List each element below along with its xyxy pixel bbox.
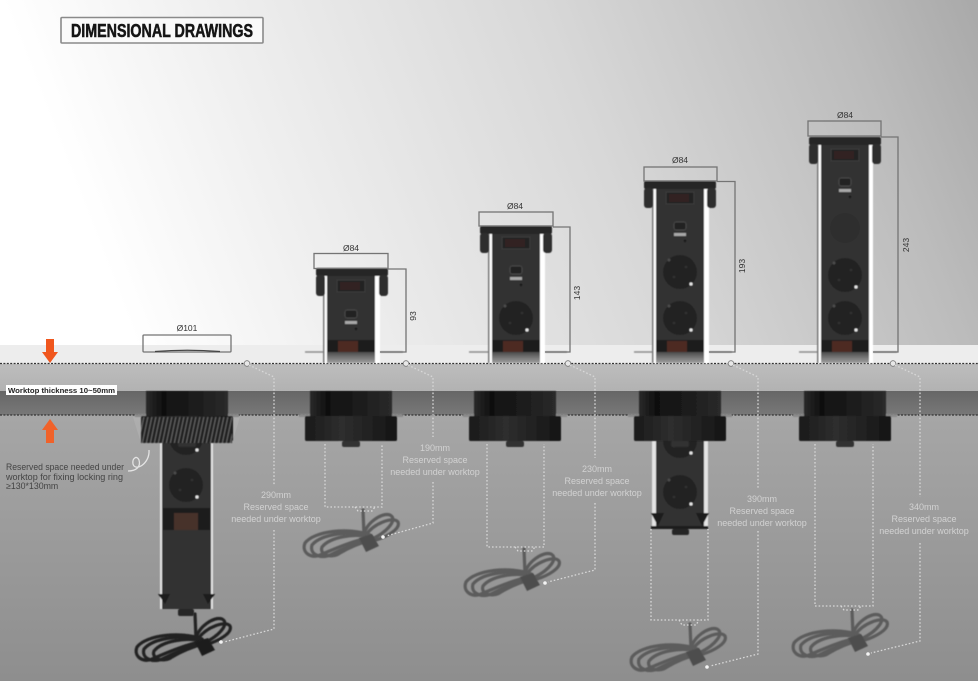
collar and locking ring, tower 243 — [793, 391, 897, 447]
worktop upper dotted edge — [0, 362, 978, 364]
reserved space halo around locking ring — [133, 417, 240, 443]
tower 243 dimensions: Ø84 — [837, 110, 853, 120]
tower 143 dimensions: 143 — [572, 286, 582, 300]
worktop top surface — [0, 345, 978, 364]
190mm callout: needed under worktop — [390, 467, 480, 477]
collar and locking ring, tower 93 — [299, 391, 403, 447]
reserved depth outline, tower 243 — [815, 444, 873, 610]
cable, flush version — [136, 614, 230, 661]
flush cover: Ø101 dimension: Ø101 — [177, 323, 198, 333]
title: DIMENSIONAL DRAWINGS — [71, 21, 253, 41]
reserved depth outline, tower 93 — [325, 444, 382, 511]
230mm callout: Reserved space — [564, 476, 630, 486]
collar and locking ring, tower 143 — [463, 391, 567, 447]
tower 93 dimensions — [314, 243, 418, 352]
reserved depth outline, tower 193 — [651, 529, 708, 625]
tower 243 — [799, 137, 897, 363]
tower 143 dimensions — [479, 201, 582, 352]
worktop underside band — [0, 391, 978, 415]
390mm callout: needed under worktop — [717, 518, 807, 528]
tower 143 dimensions: Ø84 — [507, 201, 523, 211]
340mm callout: 340mm — [909, 502, 939, 512]
tower 193 dimensions: 193 — [737, 259, 747, 273]
tower 243 dimensions: 243 — [901, 238, 911, 252]
title — [61, 18, 263, 43]
collar and locking ring, flush version — [135, 391, 239, 447]
390mm callout — [705, 361, 807, 669]
worktop lower dotted edge — [0, 414, 978, 416]
collar and locking ring, tower 193 — [628, 391, 732, 447]
340mm callout: needed under worktop — [879, 526, 969, 536]
lowered tower below first collar — [158, 421, 215, 616]
390mm callout: 390mm — [747, 494, 777, 504]
note pointer squiggle — [128, 450, 149, 471]
tower 143 — [469, 226, 567, 363]
background gradient — [0, 0, 978, 346]
230mm callout: 230mm — [582, 464, 612, 474]
190mm callout — [381, 361, 480, 539]
340mm callout: Reserved space — [891, 514, 957, 524]
tower 93 dimensions: 93 — [408, 311, 418, 321]
plug, tower 93 — [359, 534, 379, 552]
plug, flush version — [195, 638, 215, 656]
tower 93 — [305, 268, 403, 363]
230mm callout — [543, 361, 642, 585]
cable, tower 93 — [304, 510, 398, 557]
locking ring note: Reserved space needed under — [6, 462, 124, 472]
tower 243 dimensions — [808, 110, 911, 352]
plug, tower 243 — [848, 634, 868, 652]
290mm callout: 290mm — [261, 490, 291, 500]
340mm callout — [866, 361, 969, 656]
cable, tower 143 — [465, 549, 559, 596]
tower 93 dimensions: Ø84 — [343, 243, 359, 253]
290mm callout — [219, 361, 321, 644]
cable, tower 193 — [631, 624, 725, 671]
locking ring note: ≥130*130mm — [6, 481, 58, 491]
worktop front face — [0, 364, 978, 391]
thickness arrow up — [42, 419, 58, 443]
tower 193 dimensions: Ø84 — [672, 155, 688, 165]
cable, tower 243 — [793, 610, 887, 657]
tower 193 — [634, 181, 732, 363]
lowered tower below third collar — [651, 424, 709, 535]
worktop thickness label: Worktop thickness 10~50mm — [8, 386, 115, 395]
locking ring note: worktop for fixing locking ring — [5, 472, 123, 482]
tower 193 dimensions — [644, 155, 747, 352]
190mm callout: 190mm — [420, 443, 450, 453]
290mm callout: Reserved space — [243, 502, 309, 512]
locking ring note — [5, 462, 124, 491]
plug, tower 193 — [686, 648, 706, 666]
390mm callout: Reserved space — [729, 506, 795, 516]
plug, tower 143 — [520, 573, 540, 591]
190mm callout: Reserved space — [402, 455, 468, 465]
230mm callout: needed under worktop — [552, 488, 642, 498]
thickness arrow down — [42, 339, 58, 363]
area under worktop — [0, 415, 978, 681]
flush cover: Ø101 dimension — [143, 323, 231, 352]
290mm callout: needed under worktop — [231, 514, 321, 524]
reserved depth outline, tower 143 — [487, 444, 544, 551]
